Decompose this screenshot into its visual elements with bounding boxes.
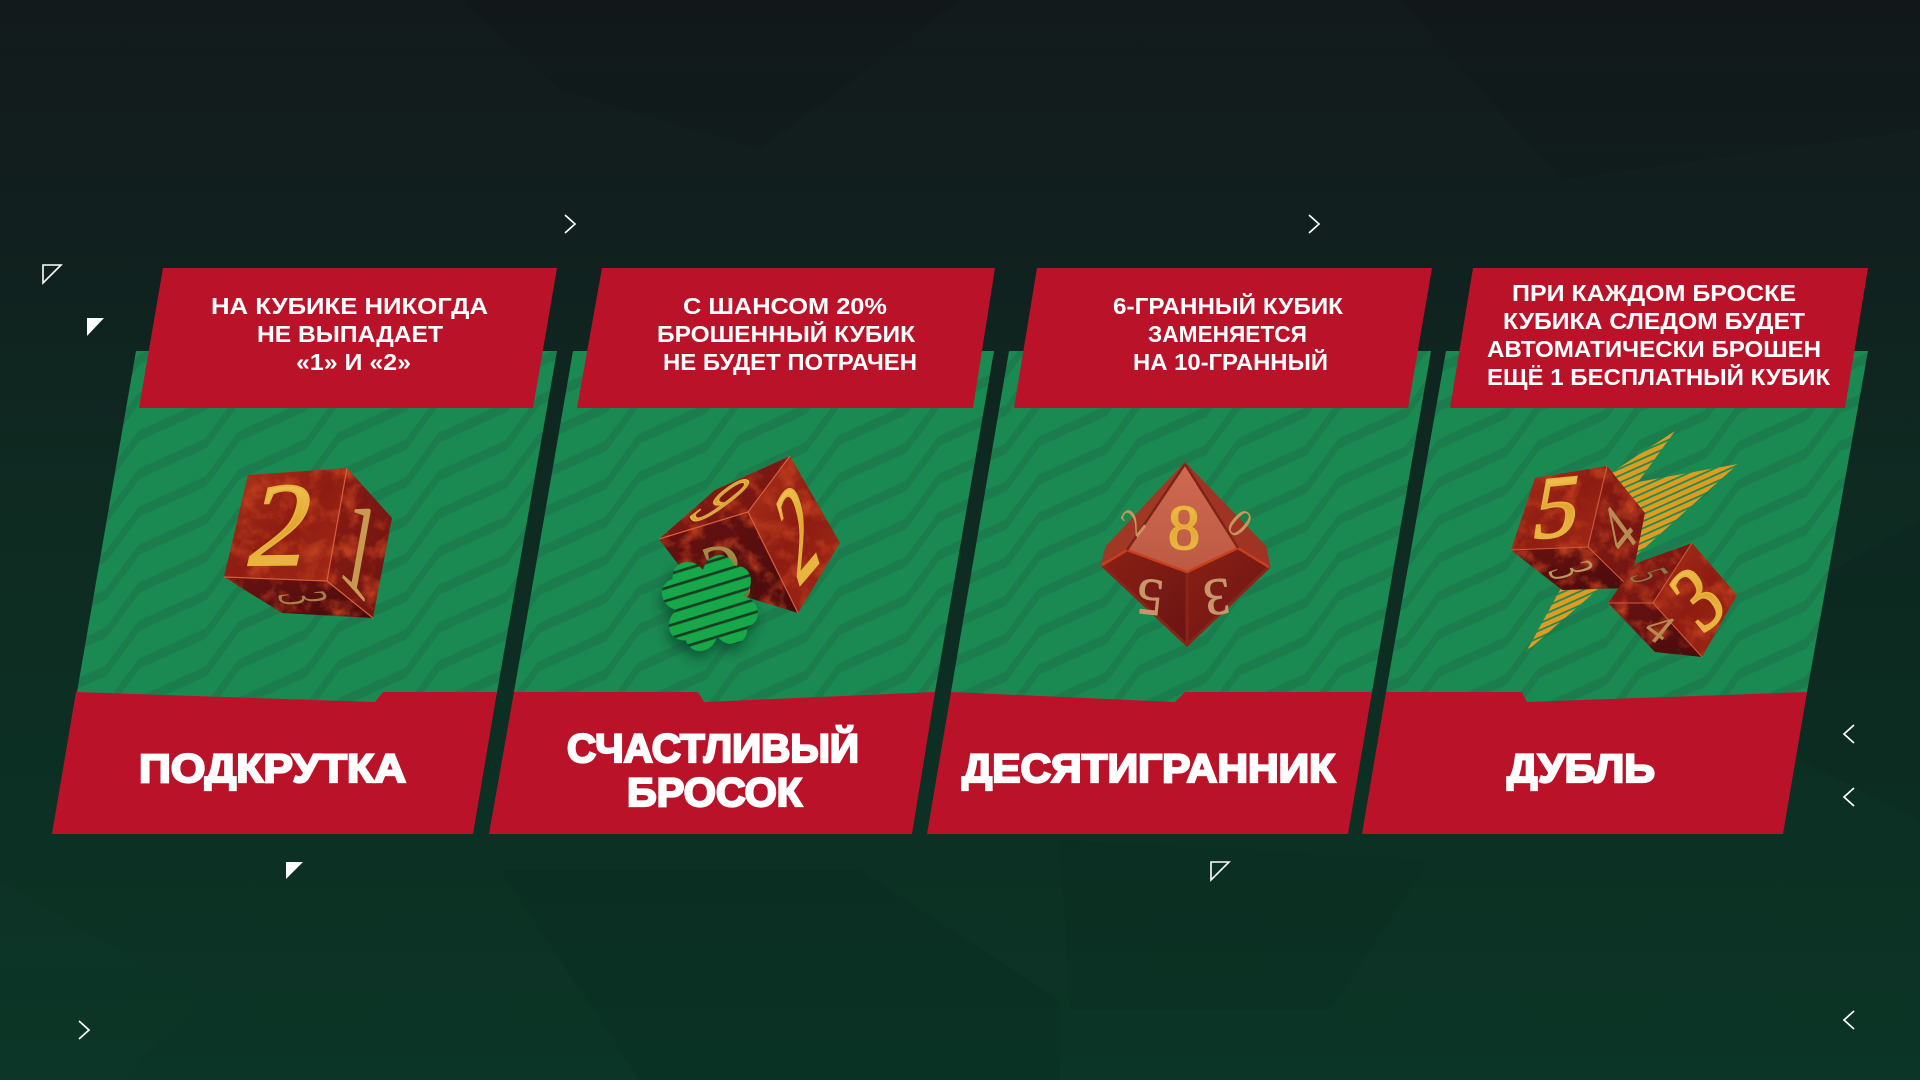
title <box>489 692 935 834</box>
description banner: 6-ГРАННЫЙ КУБИК <box>1113 292 1344 319</box>
description banner <box>1450 268 1868 408</box>
decorative arrow: bottom-left chevron <box>79 1021 89 1039</box>
panel: ПОДКРУТКА <box>52 268 557 834</box>
description banner <box>1014 268 1432 408</box>
die with clover: 3 <box>690 527 765 621</box>
ten-sided die: 5 <box>1134 567 1166 627</box>
ten-sided die: 2 <box>1114 500 1154 546</box>
two dice with lightning: 3 <box>1533 554 1610 586</box>
panel: ДЕСЯТИГРАННИК <box>927 268 1432 834</box>
title: ПОДКРУТКА <box>139 747 406 791</box>
outline triangle bottom <box>1211 862 1229 880</box>
icon: lightning bolt <box>1526 431 1738 652</box>
description banner: С ШАНСОМ 20% <box>683 293 887 319</box>
decorative arrow: right chevron two <box>1844 788 1854 806</box>
title <box>1362 692 1807 834</box>
description banner: АВТОМАТИЧЕСКИ БРОШЕН <box>1487 336 1821 362</box>
ten-sided die: 3 <box>1201 567 1233 627</box>
description banner: НА 10-ГРАННЫЙ <box>1133 348 1328 375</box>
description banner: «1» И «2» <box>296 349 411 375</box>
description banner: БРОШЕННЫЙ КУБИК <box>657 320 916 347</box>
ten-sided die: 8 <box>1168 492 1200 563</box>
description banner <box>139 268 557 408</box>
title: БРОСОК <box>627 771 803 815</box>
die with 2 and 1: 2 <box>237 459 327 592</box>
description banner: НА КУБИКЕ НИКОГДА <box>211 293 488 319</box>
icon: clover <box>657 550 763 656</box>
decorative arrow: right chevron one <box>1844 725 1854 743</box>
two dice with lightning: 5 <box>1617 562 1682 588</box>
title: ДЕСЯТИГРАННИК <box>962 747 1336 791</box>
description banner: КУБИКА СЛЕДОМ БУДЕТ <box>1503 308 1805 334</box>
filled triangle upper left <box>87 318 104 336</box>
die with 2 and 1: 1 <box>332 462 388 634</box>
decorative arrow: right chevron three <box>1844 1011 1854 1029</box>
description banner: ЗАМЕНЯЕТСЯ <box>1148 321 1307 347</box>
description banner <box>577 268 995 408</box>
ten-sided die: 0 <box>1219 501 1260 547</box>
decorative arrow: top chevron right <box>1309 215 1319 233</box>
filled triangle bottom <box>286 862 303 879</box>
description banner: ЕЩЁ 1 БЕСПЛАТНЫЙ КУБИК <box>1487 363 1831 390</box>
title <box>927 692 1372 834</box>
two dice with lightning <box>1511 431 1742 657</box>
description banner: НЕ БУДЕТ ПОТРАЧЕН <box>663 349 917 375</box>
die with 2 and 1: 3 <box>262 588 344 608</box>
two dice with lightning: 3 <box>1653 545 1742 652</box>
die with clover: 2 <box>764 449 830 615</box>
panel: СЧАСТЛИВЫЙ БРОСОК <box>489 268 995 834</box>
title: ДУБЛЬ <box>1507 747 1655 791</box>
ten-sided die <box>1102 464 1269 645</box>
title: СЧАСТЛИВЫЙ <box>567 725 859 771</box>
description banner: НЕ ВЫПАДАЕТ <box>257 321 443 347</box>
die with clover: 9 <box>670 463 771 539</box>
two dice with lightning: 4 <box>1588 490 1648 570</box>
panel: ДУБЛЬ <box>1362 268 1868 834</box>
die with 2 and 1 <box>224 459 392 634</box>
die with clover <box>657 449 840 656</box>
two dice with lightning: 5 <box>1526 455 1589 559</box>
outline triangle upper left <box>43 265 61 283</box>
title <box>52 692 497 834</box>
description banner: ПРИ КАЖДОМ БРОСКЕ <box>1512 280 1796 306</box>
decorative arrow: top chevron left <box>565 215 575 233</box>
two dice with lightning: 4 <box>1635 601 1685 653</box>
